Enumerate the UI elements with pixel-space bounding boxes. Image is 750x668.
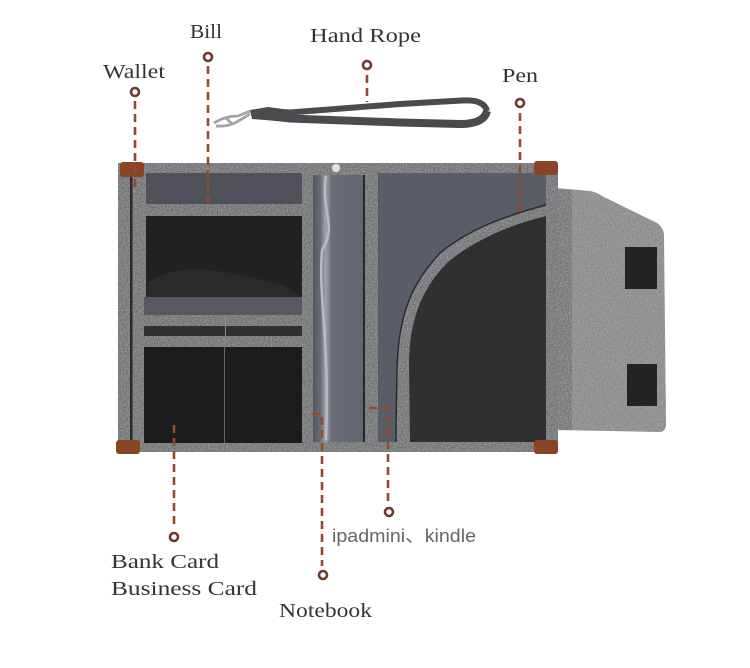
callout: Pen — [502, 65, 538, 216]
callout: Notebook — [279, 414, 373, 622]
callout: Bank Card / Business Card: Business Card — [111, 578, 257, 600]
callout: Notebook: Notebook — [279, 600, 373, 622]
left page — [144, 173, 302, 443]
snap button — [332, 164, 340, 172]
callout: ipadmini, kindle — [332, 408, 476, 546]
right page — [378, 173, 546, 442]
wallet body — [118, 163, 558, 452]
callout: Wallet: Wallet — [103, 61, 165, 83]
leather corners — [116, 161, 558, 454]
callout: Bank Card / Business Card: Bank Card — [111, 551, 219, 573]
callout: Hand Rope: Hand Rope — [310, 25, 421, 47]
satin pocket — [313, 175, 365, 442]
illustration: travel wallet organizer — [116, 161, 666, 454]
flap with velcro — [556, 188, 666, 432]
callout: Bill — [190, 21, 222, 203]
callout: Bill: Bill — [190, 21, 222, 43]
callout: Pen: Pen — [502, 65, 538, 87]
callout: ipadmini, kindle: ipadmini、kindle — [332, 525, 476, 546]
hand rope strap — [214, 100, 487, 126]
metal clasp — [214, 111, 250, 126]
callout: Bank Card / Business Card — [111, 425, 257, 600]
velcro patch top — [625, 247, 657, 289]
velcro patch bottom — [627, 364, 657, 406]
callout: Hand Rope — [310, 25, 421, 102]
callout: Wallet — [103, 61, 165, 190]
